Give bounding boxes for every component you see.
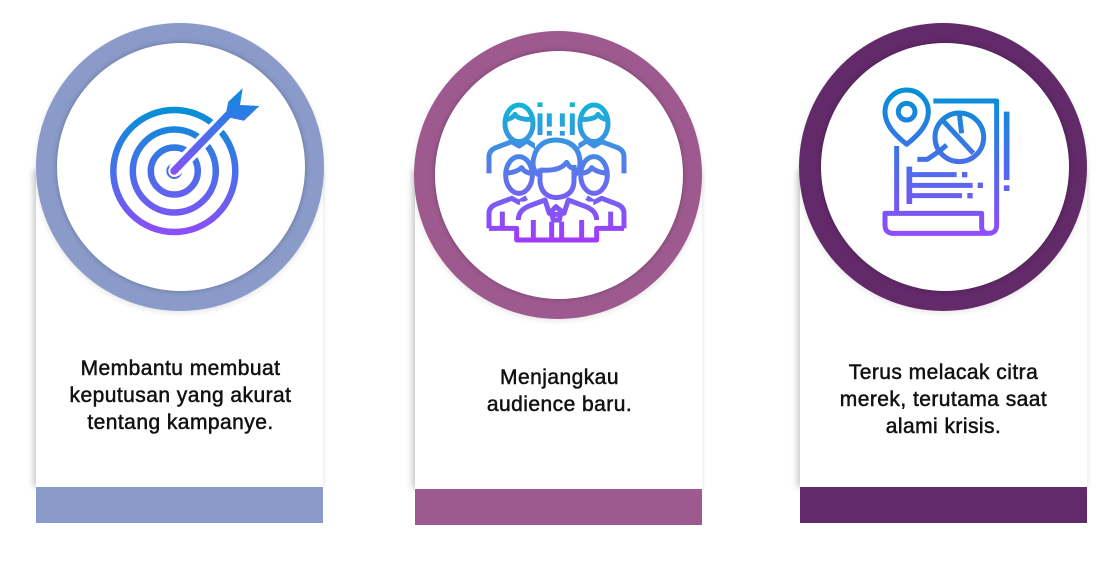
text: card 2: Menjangkau [500,366,619,389]
text: card 3: alami krisis. [886,415,1001,438]
panel: card 2 [415,170,702,489]
text: card 3: merek, terutama saat [840,388,1047,411]
card 2 footer bar [415,489,702,525]
card 3 footer bar [800,487,1087,523]
circle centre 3 [821,43,1069,291]
text: card 1 [70,357,292,434]
panel: card 3 [800,170,1087,487]
text: card 3 [840,361,1047,438]
circle centre 1 [57,43,305,291]
card 1 footer bar [36,487,323,523]
circle ring 3 [799,23,1087,311]
text: card 1: tentang kampanye. [87,411,274,434]
text: card 1: keputusan yang akurat [70,384,291,407]
text: card 3: Terus melacak citra [849,361,1038,384]
text: card 2: audience baru. [487,393,632,416]
text: card 2 [487,366,632,416]
circle ring 1 [36,23,324,311]
text: card 1: Membantu membuat [81,357,280,380]
circle centre 2 [435,51,683,299]
panel: card 1 [36,170,323,487]
circle ring 2 [414,31,702,319]
